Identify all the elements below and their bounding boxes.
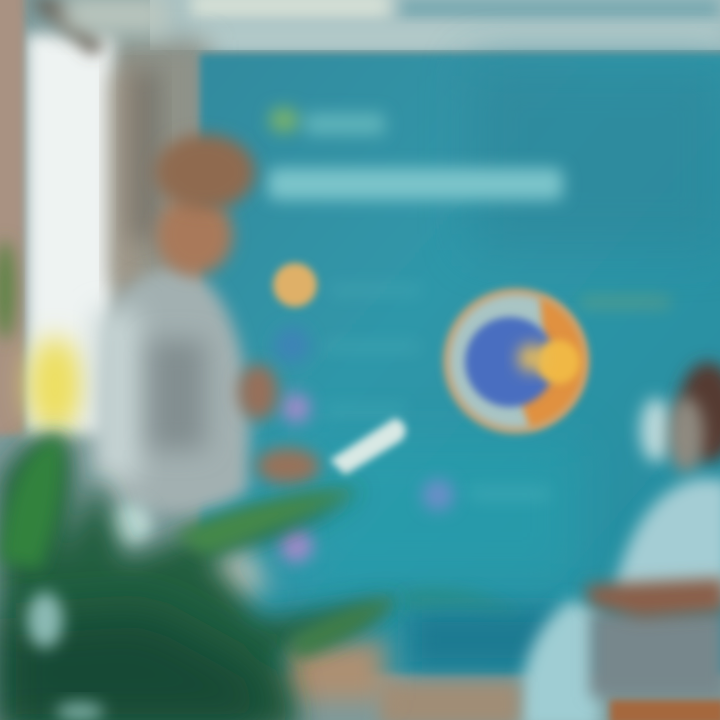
wall heading: blurred logo and title bbox=[268, 108, 563, 200]
donut chart on the wall bbox=[443, 288, 589, 434]
window and post on the left bbox=[0, 0, 170, 435]
floor bbox=[280, 640, 520, 720]
wall bullet icons bbox=[273, 263, 454, 562]
child figure bbox=[95, 134, 406, 626]
foreground plant bbox=[0, 240, 525, 720]
wall faint text lines bbox=[325, 285, 670, 500]
seated person on the right bbox=[520, 362, 720, 720]
teal wall panel bbox=[200, 54, 720, 674]
